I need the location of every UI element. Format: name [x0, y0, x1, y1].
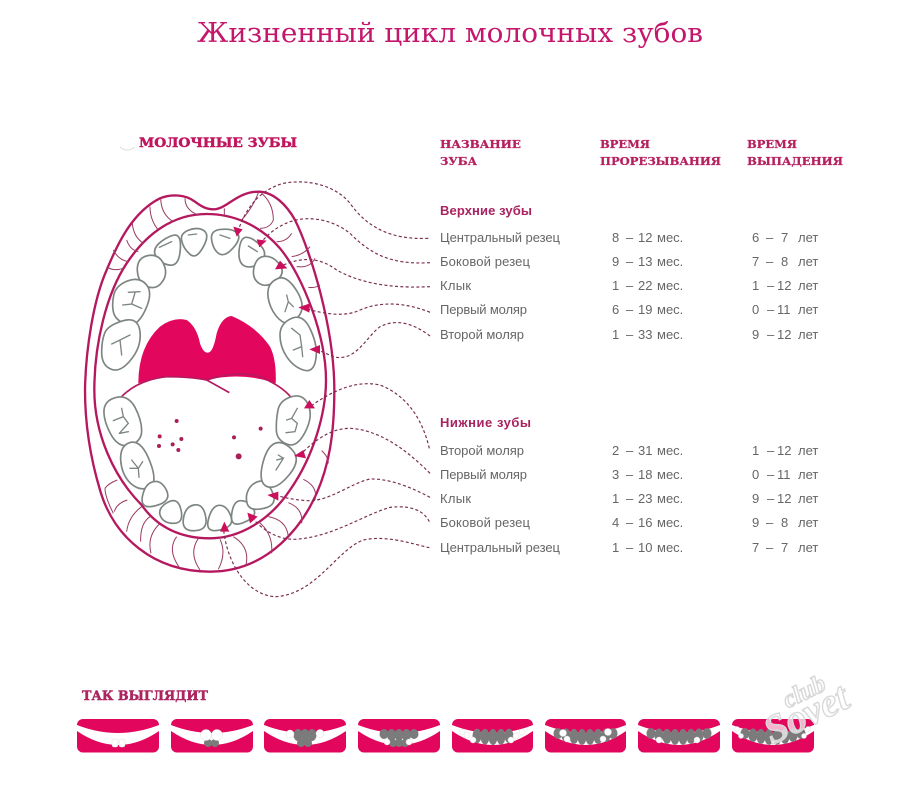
lower teeth table: 10 [638, 540, 652, 555]
table header: ЗУБА [440, 154, 478, 168]
upper teeth table: 19 [638, 302, 652, 317]
upper teeth table: – [626, 302, 634, 317]
lower teeth table: 12 [777, 491, 791, 506]
lower teeth table: – [626, 515, 634, 530]
upper teeth table: мес. [657, 254, 683, 269]
upper teeth table: – [766, 254, 774, 269]
upper teeth table: Верхние зубы [440, 203, 532, 218]
lower mouth: gums, tongue dots, teeth [104, 384, 430, 597]
upper teeth table: 8 [781, 254, 788, 269]
lower teeth table: Центральный резец [440, 540, 561, 555]
upper teeth table: – [626, 327, 634, 342]
upper arrowheads [233, 227, 320, 354]
stage 7 mouth [638, 719, 720, 752]
upper teeth table: 6 [752, 230, 759, 245]
upper teeth table: – [626, 230, 634, 245]
upper teeth table: лет [798, 230, 818, 245]
lower teeth table: лет [798, 443, 818, 458]
lower teeth table: Второй моляр [440, 443, 524, 458]
lower teeth table: 8 [781, 515, 788, 530]
stage 3 mouth [264, 719, 346, 752]
title: Жизненный цикл молочных зубов [197, 18, 703, 49]
stage 6 mouth [545, 719, 626, 752]
upper teeth table: 33 [638, 327, 652, 342]
stage 8 mouth [732, 719, 814, 752]
lower teeth table: – [766, 540, 774, 555]
lower teeth table: – [767, 467, 775, 482]
lower teeth table: 9 [752, 515, 759, 530]
lower teeth table: 12 [777, 443, 791, 458]
upper teeth table: 1 [612, 278, 619, 293]
lower teeth table: 7 [752, 540, 759, 555]
mouth diagram [85, 182, 430, 597]
upper teeth table: 12 [777, 327, 791, 342]
upper gum folds [107, 193, 320, 288]
upper teeth table: лет [798, 254, 818, 269]
lower arrowheads [220, 400, 315, 532]
lower teeth table: 3 [612, 467, 619, 482]
table header: ВРЕМЯ [600, 137, 650, 151]
upper teeth table: 7 [781, 230, 788, 245]
lower teeth table: 23 [638, 491, 652, 506]
upper teeth table: – [767, 327, 775, 342]
upper teeth table: – [767, 302, 775, 317]
lower teeth table: мес. [657, 491, 683, 506]
lower teeth table: 4 [612, 515, 619, 530]
lower teeth table: лет [798, 467, 818, 482]
upper teeth table: 12 [638, 230, 652, 245]
lower teeth table: – [767, 443, 775, 458]
upper teeth table: 7 [752, 254, 759, 269]
upper teeth table: лет [798, 302, 818, 317]
lower teeth table: мес. [657, 443, 683, 458]
upper teeth table: 6 [612, 302, 619, 317]
palate [138, 316, 276, 383]
lower teeth table: 2 [612, 443, 619, 458]
upper teeth table: – [626, 254, 634, 269]
upper leader lines [238, 182, 430, 358]
tongue line [120, 374, 292, 398]
upper teeth table: 11 [777, 302, 790, 317]
upper teeth table: мес. [657, 230, 683, 245]
lower teeth table: мес. [657, 540, 683, 555]
lower teeth table: – [767, 491, 775, 506]
lips [85, 192, 334, 572]
lower teeth table: – [626, 540, 634, 555]
lower teeth table: – [626, 443, 634, 458]
lower teeth table: Первый моляр [440, 467, 527, 482]
lower teeth table: 0 [752, 467, 759, 482]
upper teeth table: Центральный резец [440, 230, 561, 245]
lower teeth table: 1 [612, 540, 619, 555]
upper teeth table: Первый моляр [440, 302, 527, 317]
upper teeth table: 22 [638, 278, 652, 293]
upper teeth table: лет [798, 327, 818, 342]
lower teeth table: лет [798, 540, 818, 555]
lower teeth table: 1 [752, 443, 759, 458]
lower teeth table: – [626, 467, 634, 482]
lower teeth table: Боковой резец [440, 515, 531, 530]
table header: ВЫПАДЕНИЯ [747, 154, 843, 168]
watermark: club [778, 670, 830, 714]
lower teeth table: – [766, 515, 774, 530]
lower leader lines [223, 384, 430, 597]
lower teeth table: лет [798, 515, 818, 530]
upper teeth table: 9 [612, 254, 619, 269]
upper teeth table: 12 [777, 278, 791, 293]
lower teeth table: 7 [781, 540, 788, 555]
lower teeth table: 1 [612, 491, 619, 506]
upper teeth table: мес. [657, 302, 683, 317]
lower teeth table: 9 [752, 491, 759, 506]
upper teeth table: 1 [752, 278, 759, 293]
upper teeth table: – [766, 230, 774, 245]
stage 5 mouth [452, 719, 533, 752]
watermark: Sovet [756, 673, 858, 753]
upper teeth table: 0 [752, 302, 759, 317]
lower teeth table: Клык [440, 491, 471, 506]
upper teeth table: Боковой резец [440, 254, 531, 269]
upper teeth table: 1 [612, 327, 619, 342]
upper teeth [102, 228, 316, 371]
upper teeth table: Клык [440, 278, 471, 293]
table header: НАЗВАНИЕ [440, 137, 521, 151]
upper teeth table: мес. [657, 327, 683, 342]
upper teeth table: Второй моляр [440, 327, 524, 342]
lower teeth table: 11 [777, 467, 790, 482]
lower teeth table: мес. [657, 467, 683, 482]
lower teeth table: 31 [638, 443, 652, 458]
upper teeth table: 8 [612, 230, 619, 245]
lower teeth table: мес. [657, 515, 683, 530]
upper teeth table: – [767, 278, 775, 293]
lower teeth table: 18 [638, 467, 652, 482]
upper teeth table: – [626, 278, 634, 293]
heading: how it looks: ТАК ВЫГЛЯДИТ [82, 689, 208, 704]
lower teeth table: – [626, 491, 634, 506]
lower teeth table [440, 415, 818, 555]
upper teeth table: мес. [657, 278, 683, 293]
lower teeth [104, 396, 310, 531]
table header [440, 137, 843, 168]
section heading: milk teeth: МОЛОЧНЫЕ ЗУБЫ [139, 136, 297, 151]
upper teeth table [440, 203, 818, 342]
upper teeth table: 9 [752, 327, 759, 342]
stage 1 mouth [77, 719, 159, 752]
stage 2 mouth [171, 719, 253, 752]
lower teeth table: Нижние зубы [440, 415, 531, 430]
table header: ВРЕМЯ [747, 137, 797, 151]
upper teeth table: 13 [638, 254, 652, 269]
lower teeth table: 16 [638, 515, 652, 530]
table header: ПРОРЕЗЫВАНИЯ [600, 154, 721, 168]
lower teeth table: лет [798, 491, 818, 506]
upper teeth table: лет [798, 278, 818, 293]
stage 4 mouth [358, 719, 440, 752]
tongue dots [157, 419, 263, 459]
